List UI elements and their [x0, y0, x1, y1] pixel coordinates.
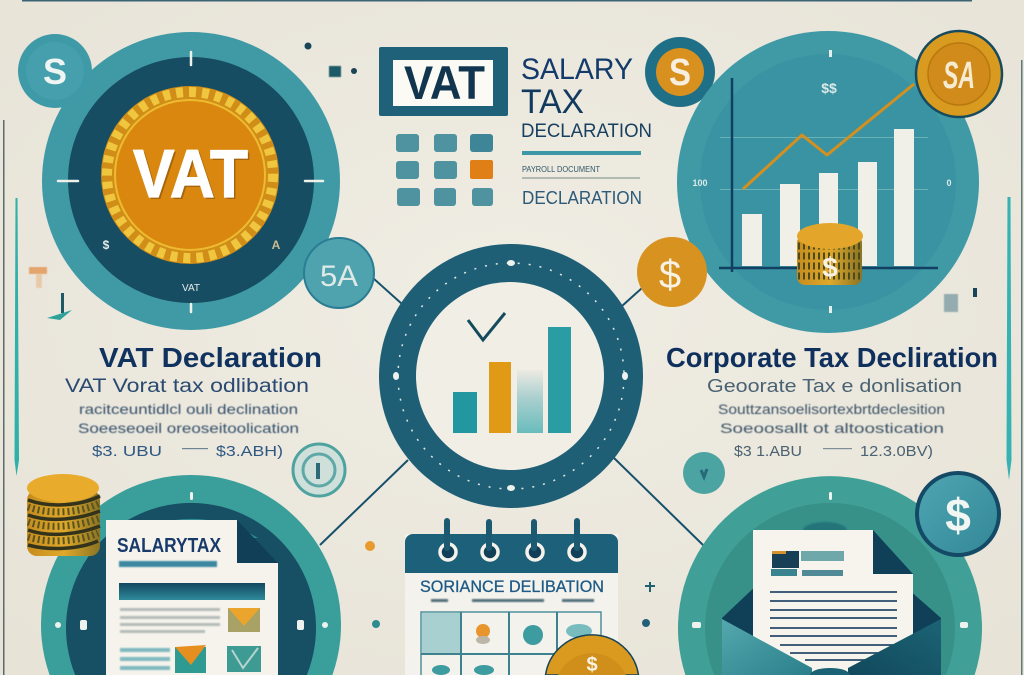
calendar rings [440, 521, 585, 560]
icon: teal 5A badge [304, 238, 374, 308]
text block: corporate tax declaration: Geoorate Tax e donlisation [707, 376, 962, 396]
panel: corporate tax envelope [678, 476, 982, 675]
panel: corporate growth chart [677, 31, 979, 333]
document heading: SALARYTAX [117, 535, 222, 557]
letter lines [770, 592, 897, 660]
text block: VAT declaration: $3.ABH) [216, 443, 283, 460]
bars [742, 129, 914, 266]
panel: VAT coin medallion: VAT [133, 136, 248, 212]
calculator buttons [396, 134, 493, 206]
icon: gold coin stack [27, 474, 100, 556]
envelope front [722, 619, 812, 675]
text block: salary tax declaration: DECLARATION [522, 188, 642, 208]
text block: corporate tax declaration: Souttzansoelisortexbrtdeclesition [718, 401, 945, 417]
icon: teal dollar badge: $ [945, 489, 971, 541]
panel: VAT calculator: VAT [404, 56, 485, 109]
ring ticks [692, 492, 968, 628]
ring markers [393, 260, 628, 491]
icon: small marks: $ [103, 238, 110, 252]
document text lines [120, 608, 220, 670]
letter header [771, 551, 844, 576]
icon: calendar dollar coin [546, 635, 638, 675]
right margin rules [1006, 60, 1022, 675]
icon: check mark [468, 313, 505, 340]
panel: compliance calendar [405, 521, 618, 675]
left margin rules [3, 120, 19, 675]
text block: salary tax declaration [521, 53, 652, 208]
text block: salary tax declaration: TAX [521, 83, 584, 121]
coin label: VAT [135, 138, 250, 214]
text block: corporate tax declaration: $3 1.ABU [734, 443, 802, 460]
panel: corporate growth chart: 100 [692, 178, 708, 188]
icon: dollar coin: $ [659, 253, 681, 297]
panel: corporate growth chart: 0 [946, 178, 952, 188]
check boxes [175, 608, 261, 673]
panel: VAT calculator [379, 47, 508, 206]
coin stack: $ [822, 252, 838, 283]
icon: teal dollar badge [917, 473, 999, 555]
chart labels: $$ [821, 80, 837, 96]
bars [453, 392, 477, 433]
top edge rule [22, 0, 972, 2]
icon: SA gold coin [916, 31, 1002, 117]
panel: salary tax document [41, 475, 341, 675]
ring ticks [829, 50, 832, 57]
panel: VAT coin medallion: A [272, 238, 281, 252]
icon: dollar coin [637, 237, 707, 307]
text block: corporate tax declaration: 12.3.0BV) [860, 443, 933, 460]
icon: ring ticks [58, 52, 323, 312]
text block: salary tax declaration: SALARY [521, 53, 633, 86]
icon: teal 5A badge: 5A [320, 260, 358, 293]
coin rim [101, 86, 279, 264]
icon: concentric ring [293, 444, 345, 496]
small caption: VAT [182, 283, 200, 294]
ring ticks [55, 492, 328, 630]
icon: small teal check badge [683, 452, 725, 494]
document sheet [106, 520, 278, 675]
calendar grid [421, 612, 601, 675]
text block: VAT declaration: racitceuntidlcl ouli declination [79, 401, 298, 417]
icon: S coin: S [669, 52, 691, 94]
text block: salary tax declaration: DECLARATION [521, 121, 652, 142]
text block: VAT declaration: Soeeseoeil oreoseitoolication [78, 420, 299, 436]
icon: S coin [645, 37, 715, 107]
calendar heading: SORIANCE DELIBATION [420, 577, 604, 596]
icon: teal S badge: S [43, 51, 67, 92]
text block: VAT declaration: $3. UBU [92, 443, 162, 460]
panel: central chart ring [379, 244, 643, 508]
text block: corporate tax declaration: Soeoosallt ot altoostication [720, 420, 944, 436]
icon: teal S badge [18, 34, 92, 108]
text block: VAT declaration: VAT Declaration [99, 342, 322, 373]
panel: VAT coin medallion [42, 32, 340, 330]
letter [753, 530, 913, 675]
trend line [743, 84, 914, 189]
text block: salary tax declaration: PAYROLL DOCUMENT [522, 165, 600, 174]
axes [719, 78, 938, 272]
text block: corporate tax declaration [666, 342, 998, 460]
envelope back [722, 582, 941, 675]
text block: VAT declaration: VAT Vorat tax odlibation [65, 376, 309, 397]
connector lines [320, 278, 703, 545]
coin stack [797, 223, 863, 285]
text block: corporate tax declaration: Corporate Tax Decliration [666, 342, 998, 373]
icon: SA gold coin: SA [943, 55, 975, 97]
envelope shadow [803, 522, 847, 538]
text block: VAT declaration [65, 342, 322, 460]
